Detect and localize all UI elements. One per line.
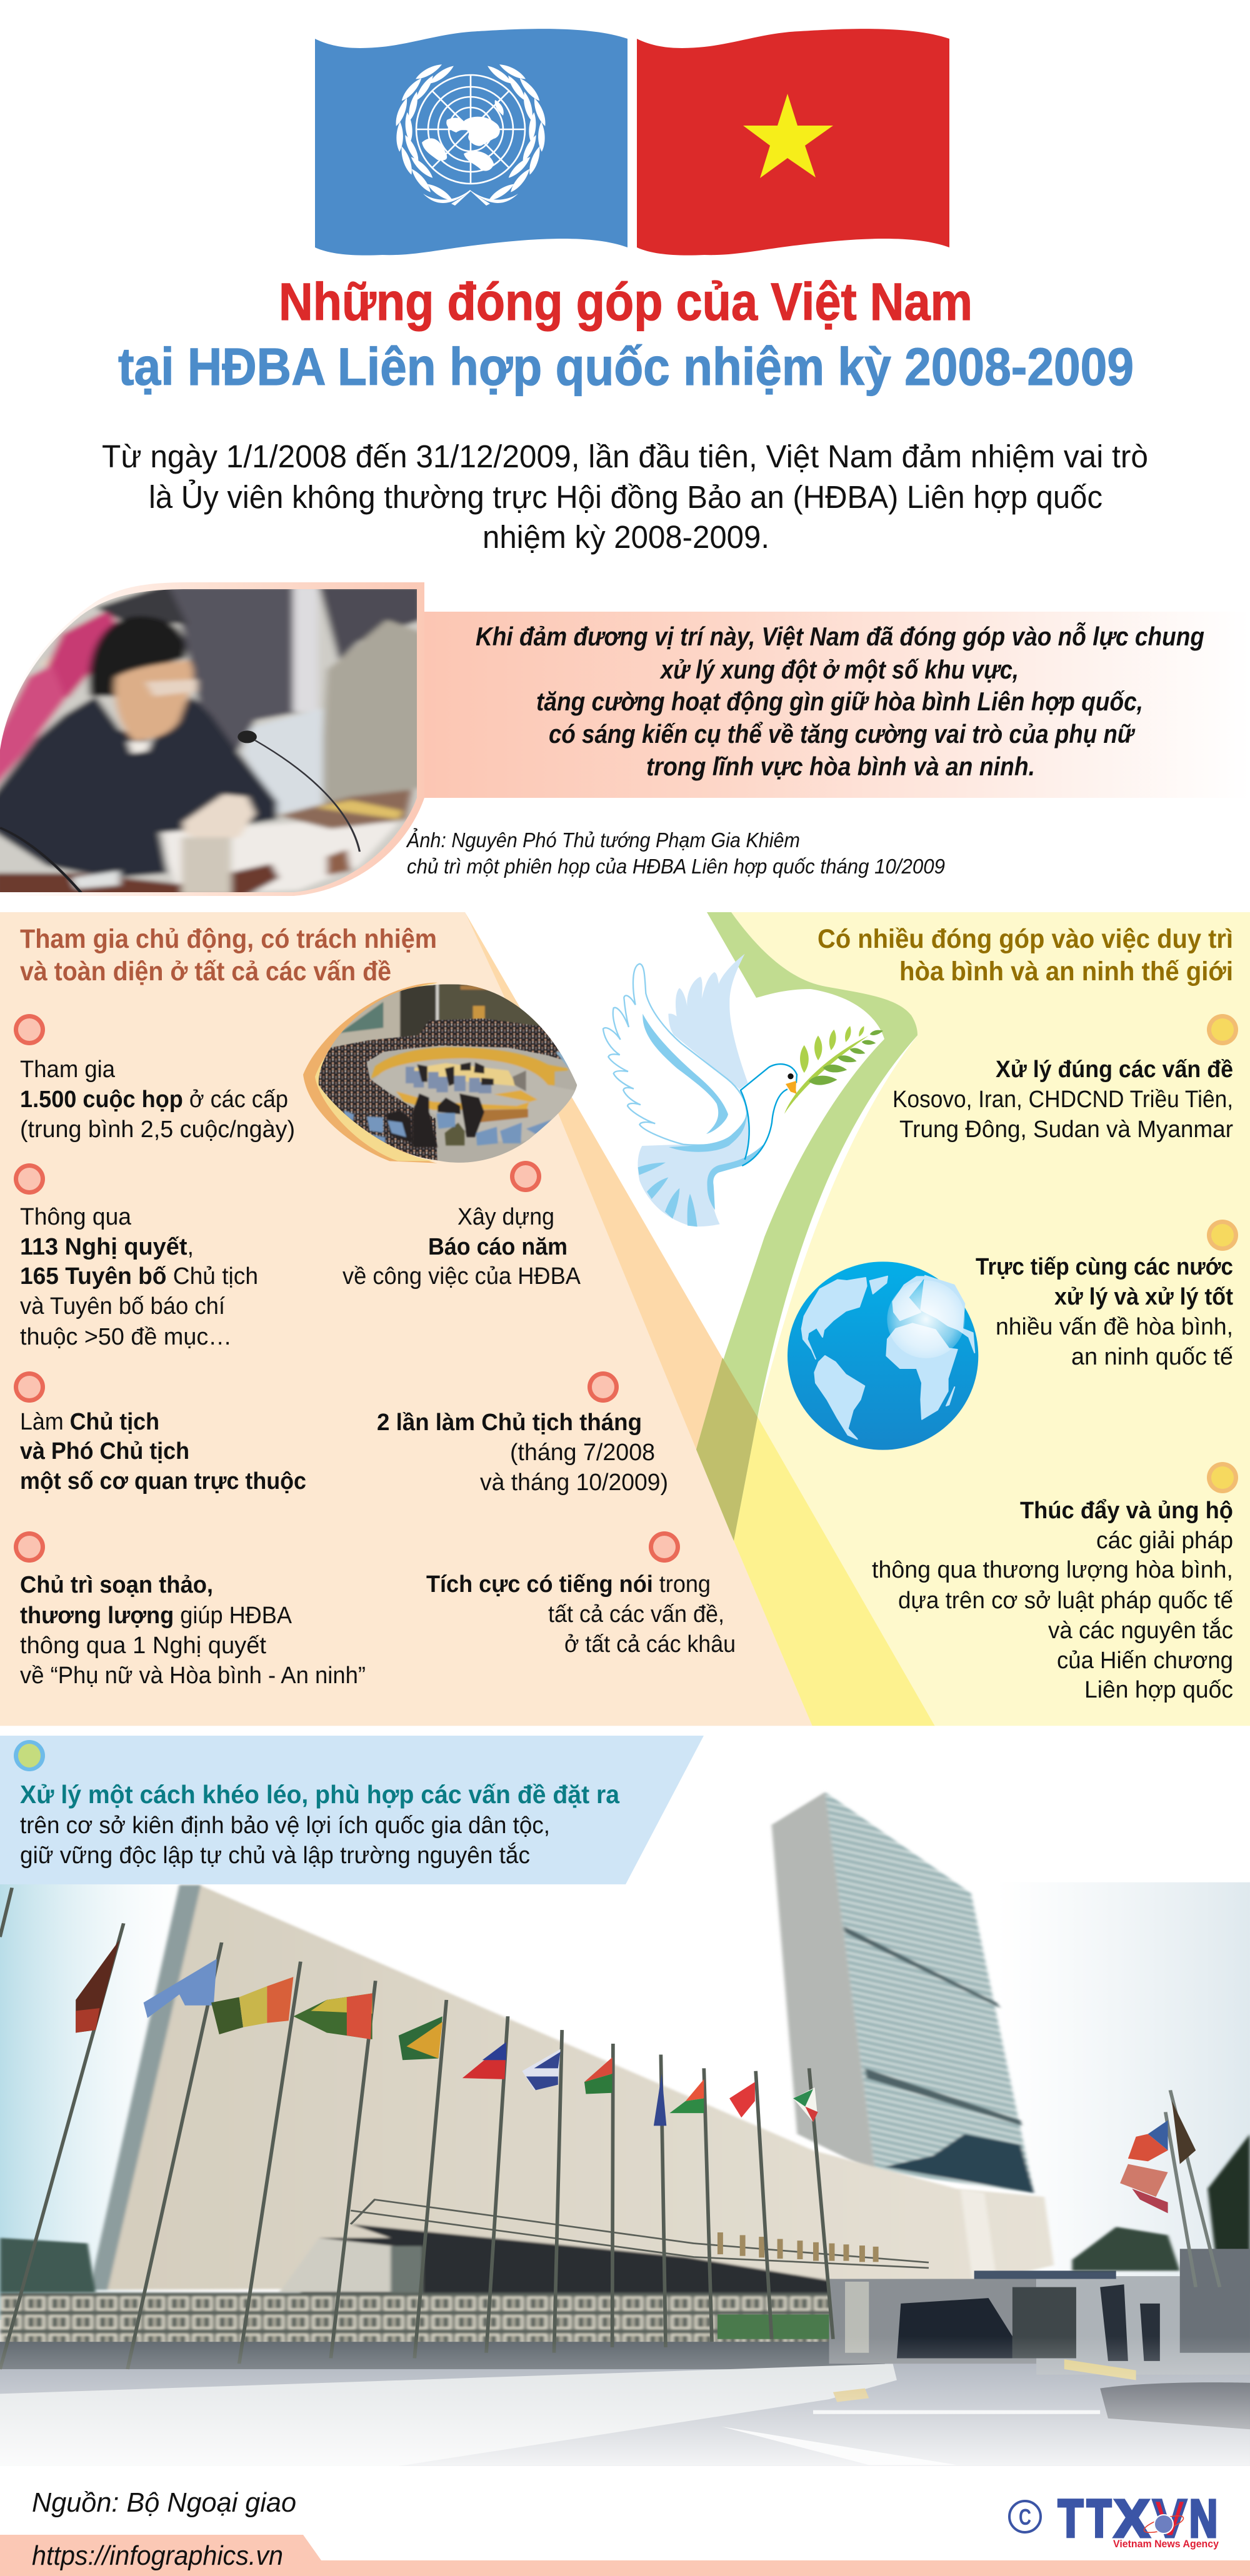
heading: [20, 924, 437, 987]
header flags: [315, 29, 949, 256]
bullet: [14, 1014, 45, 1045]
item: promote solutions: và các nguyên tắc: [1048, 1617, 1233, 1644]
item: chairmanship: và Phó Chủ tịch: [20, 1438, 189, 1465]
intro text: Từ ngày 1/1/2008 đến 31/12/2009, lần đầu tiên, Việt Nam đảm nhiệm vai trò: [102, 439, 1148, 474]
item: promote solutions: Liên hợp quốc: [1084, 1677, 1233, 1703]
item: drafting: Chủ trì soạn thảo,: [20, 1572, 213, 1598]
item: drafting: thương lượng giúp HĐBA: [20, 1603, 292, 1629]
item: drafting: thông qua 1 Nghị quyết: [20, 1633, 266, 1659]
bullet: [1207, 1014, 1238, 1045]
title: Những đóng góp của Việt Nam: [279, 272, 972, 331]
item: resolutions: 165 Tuyên bố Chủ tịch: [20, 1263, 258, 1290]
logo: TTXVN: V: [1153, 2489, 1186, 2548]
quote text: trong lĩnh vực hòa bình và an ninh.: [646, 752, 1035, 781]
heading: Tham gia chủ động, có trách nhiệm: [20, 924, 437, 954]
callout: flexible handling: giữ vững độc lập tự chủ và lập trường nguyên tắc: [20, 1842, 530, 1869]
title: [118, 272, 1134, 396]
item: promote solutions: thông qua thương lượng hòa bình,: [872, 1557, 1233, 1583]
item: monthly presidency: [377, 1371, 668, 1496]
panel: active participation: [14, 924, 736, 1689]
logo: TTXVN: T: [1087, 2489, 1111, 2548]
logo: TTXVN: N: [1189, 2489, 1218, 2548]
footer bar: [0, 2535, 1250, 2576]
bullet: [14, 1371, 45, 1403]
item: resolutions: Thông qua: [20, 1204, 132, 1230]
logo: TTXVN: [1009, 2489, 1219, 2550]
item: chairmanship: một số cơ quan trực thuộc: [20, 1468, 306, 1494]
item: resolutions: 113 Nghị quyết,: [20, 1234, 194, 1260]
item: issues handled: Xử lý đúng các vấn đề: [996, 1057, 1233, 1083]
panel: peace contributions: [818, 924, 1238, 1703]
quote text: tăng cường hoạt động gìn giữ hòa bình Liên hợp quốc,: [536, 687, 1143, 716]
intro text: là Ủy viên không thường trực Hội đồng Bảo an (HĐBA) Liên hợp quốc: [149, 479, 1102, 515]
item: 1.500 meetings: 1.500 cuộc họp ở các cấp: [20, 1087, 288, 1113]
quote text: có sáng kiến cụ thể về tăng cường vai trò của phụ nữ: [549, 719, 1136, 748]
bullet: [1207, 1220, 1238, 1251]
bullet: [14, 1163, 45, 1195]
item: promote solutions: của Hiến chương: [1057, 1648, 1233, 1674]
item: direct work: nhiều vấn đề hòa bình,: [996, 1314, 1233, 1340]
photo: UN headquarters: [0, 1726, 1250, 2466]
item: direct work: xử lý và xử lý tốt: [1054, 1284, 1233, 1310]
website link: https://infographics.vn: [32, 2540, 283, 2571]
secretariat tower: [772, 1792, 1034, 2193]
item: promote solutions: dựa trên cơ sở luật pháp quốc tế: [898, 1588, 1233, 1614]
general assembly building: [88, 1885, 1054, 2312]
intro text: nhiệm kỳ 2008-2009.: [482, 519, 769, 555]
item: voice: ở tất cả các khâu: [564, 1631, 736, 1658]
item: 1.500 meetings: (trung bình 2,5 cuộc/ngày): [20, 1116, 295, 1143]
icon: UN emblem: [393, 62, 548, 206]
item: voice: tất cả các vấn đề,: [548, 1601, 724, 1628]
source text: Nguồn: Bộ Ngoại giao: [32, 2487, 296, 2518]
ground and fence: [0, 2134, 1250, 2466]
item: monthly presidency: (tháng 7/2008: [510, 1440, 655, 1466]
item: resolutions: và Tuyên bố báo chí: [20, 1293, 225, 1320]
logo: TTXVN: T: [1058, 2489, 1083, 2548]
item: direct work: Trực tiếp cùng các nước: [976, 1254, 1233, 1280]
heading: [818, 924, 1233, 987]
item: annual report: Báo cáo năm: [428, 1234, 568, 1260]
item: drafting: [14, 1531, 366, 1689]
bullet: [649, 1531, 680, 1563]
photo: Security Council chamber: [303, 981, 583, 1168]
callout: flexible handling: trên cơ sở kiên định bảo vệ lợi ích quốc gia dân tộc,: [20, 1813, 550, 1839]
flag: United Nations: [315, 29, 628, 256]
icon: globe: [788, 1261, 978, 1450]
bullet: [1207, 1462, 1238, 1493]
item: 1.500 meetings: Tham gia: [20, 1057, 116, 1083]
icon: peace dove with olive branch: [603, 954, 884, 1226]
item: resolutions: [14, 1163, 258, 1350]
pink quote banner: [424, 612, 1250, 798]
item: resolutions: thuộc >50 đề mục…: [20, 1324, 232, 1350]
logo: TTXVN: Vietnam News Agency: [1113, 2538, 1219, 2550]
flag: Vietnam: [637, 29, 949, 256]
item: promote solutions: Thúc đẩy và ủng hộ: [1020, 1498, 1233, 1524]
heading: hòa bình và an ninh thế giới: [899, 957, 1233, 987]
bullet: [14, 1740, 45, 1771]
logo: TTXVN: C: [1019, 2504, 1031, 2530]
item: direct work: [976, 1220, 1238, 1370]
flags: [76, 1940, 1196, 2213]
item: voice: [426, 1531, 736, 1658]
title: tại HĐBA Liên hợp quốc nhiệm kỳ 2008-2009: [118, 337, 1134, 396]
item: 1.500 meetings: [14, 1014, 295, 1143]
item: drafting: về “Phụ nữ và Hòa bình - An ninh”: [20, 1663, 366, 1689]
photo caption: [406, 828, 945, 878]
photo caption: chủ trì một phiên họp của HĐBA Liên hợp quốc tháng 10/2009: [407, 855, 945, 878]
item: chairmanship: [14, 1371, 306, 1494]
bullet: [14, 1531, 45, 1563]
item: annual report: Xây dựng: [458, 1204, 554, 1230]
quote text: [476, 621, 1204, 781]
quote text: xử lý xung đột ở một số khu vực,: [659, 655, 1019, 684]
panel: background shapes: [0, 912, 1250, 1726]
item: annual report: về công việc của HĐBA: [342, 1263, 581, 1290]
item: voice: Tích cực có tiếng nói trong: [426, 1571, 711, 1598]
item: annual report: [342, 1161, 581, 1290]
item: promote solutions: [872, 1462, 1238, 1703]
callout: flexible handling: [0, 1736, 704, 1884]
item: issues handled: [892, 1014, 1238, 1143]
item: issues handled: Trung Đông, Sudan và Myanmar: [899, 1116, 1233, 1143]
photo caption: Ảnh: Nguyên Phó Thủ tướng Phạm Gia Khiêm: [406, 828, 800, 852]
bullet: [588, 1371, 619, 1403]
heading: và toàn diện ở tất cả các vấn đề: [20, 957, 391, 987]
photo: Deputy PM at Security Council: [0, 577, 427, 900]
icon: yellow star: [743, 94, 833, 178]
item: monthly presidency: và tháng 10/2009): [480, 1470, 668, 1496]
logo: TTXVN: X: [1114, 2489, 1149, 2548]
intro text: [102, 439, 1148, 555]
item: chairmanship: Làm Chủ tịch: [20, 1409, 159, 1435]
item: direct work: an ninh quốc tế: [1071, 1344, 1233, 1370]
bullet: [510, 1161, 541, 1192]
item: issues handled: Kosovo, Iran, CHDCND Triều Tiên,: [892, 1087, 1233, 1113]
callout: flexible handling: Xử lý một cách khéo léo, phù hợp các vấn đề đặt ra: [20, 1780, 620, 1809]
item: monthly presidency: 2 lần làm Chủ tịch tháng: [377, 1410, 642, 1436]
flag poles: [0, 1887, 1220, 2369]
item: promote solutions: các giải pháp: [1096, 1528, 1233, 1554]
